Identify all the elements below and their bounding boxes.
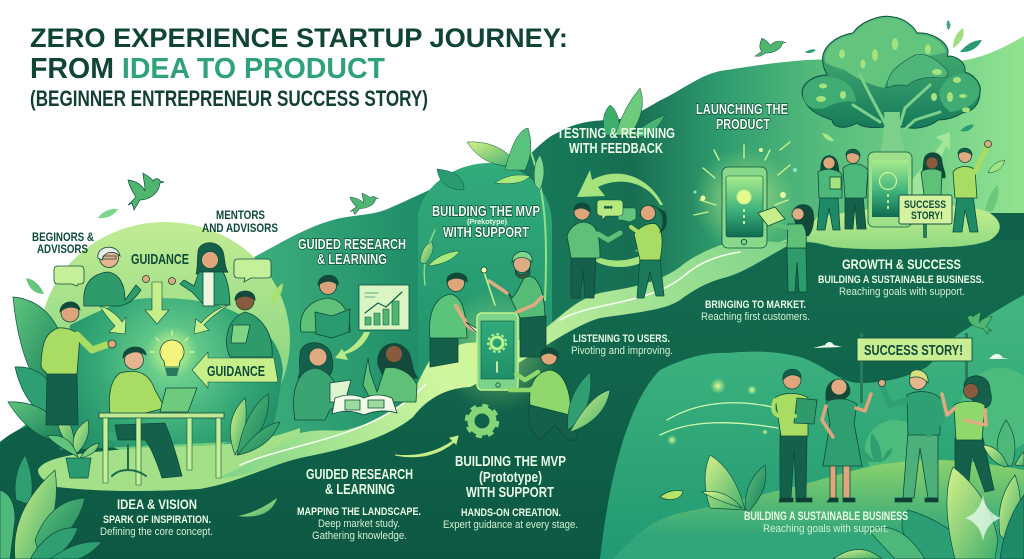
heading: testing and refining: TESTING & REFINING (557, 125, 675, 142)
heading: guided research: GUIDED RESEARCH (298, 236, 406, 253)
panel: lower left desk island (38, 428, 300, 491)
section text: idea and vision: SPARK OF INSPIRATION. (103, 514, 211, 526)
section text: bringing to market: Reaching first customers. (701, 311, 810, 323)
plant right of desk (230, 394, 280, 455)
person: man with tablet (773, 369, 817, 502)
mentor labels: GUIDANCE (131, 251, 189, 268)
plants left of idea panel (8, 297, 99, 478)
section text: listening to users: LISTENING TO USERS. (573, 333, 670, 345)
arrow: research flow (335, 332, 370, 360)
heading: testing and refining: WITH FEEDBACK (569, 140, 663, 157)
plant beside crouching helper (568, 372, 610, 432)
plants: lower right foreground (702, 420, 1024, 559)
background bushes on hill (865, 368, 1024, 480)
tree phone (868, 152, 912, 227)
person: woman delivering box (758, 205, 814, 292)
mentor labels: BEGINORS & (32, 230, 94, 244)
section text: guided research lower: MAPPING THE LANDSCAPE. (297, 506, 421, 518)
title: ZERO EXPERIENCE STARTUP JOURNEY: (30, 23, 568, 53)
mentor labels: MENTORS (216, 208, 265, 222)
mentor labels: AND ADVISORS (202, 221, 278, 235)
person: blond man waving (878, 370, 942, 502)
section text: guided research lower: Deep market study. (318, 518, 400, 530)
dark corner right of island (990, 213, 1024, 240)
person: tester man (567, 203, 620, 298)
section text: building the MVP lower: HANDS-ON CREATION. (461, 507, 561, 519)
section text: growth and success: BUILDING A SUSTAINABLE BUSINESS. (818, 274, 984, 286)
heading: launching the product: LAUNCHING THE (696, 101, 788, 118)
person: beginner advisor standing (41, 302, 116, 425)
sign: success story small: STORY! (911, 210, 943, 222)
section text: bringing to market (701, 299, 810, 323)
section text: building the MVP lower: Expert guidance at every stage. (443, 519, 578, 531)
section text: sustainable business (744, 511, 908, 535)
tree of growth (802, 16, 980, 153)
panel: building the MVP arch (418, 163, 552, 400)
section text: building the MVP lower: WITH SUPPORT (466, 484, 554, 501)
person: tester woman (631, 205, 666, 298)
panel: idea and vision circle (40, 222, 290, 458)
section text: guided research lower: GUIDED RESEARCH (306, 466, 413, 483)
person: crouching helper (510, 348, 578, 440)
person: builder left (430, 273, 484, 367)
background growth arrow (912, 132, 950, 195)
phone with gear prototype (477, 313, 518, 390)
section text: sustainable business: Reaching goals with support. (763, 523, 889, 535)
section text: listening to users: Pivoting and improving. (571, 345, 673, 357)
glow behind prototype phone (435, 288, 559, 412)
light bulb (146, 326, 198, 378)
people: launch team (817, 140, 992, 232)
launch sparks (692, 142, 797, 252)
glowing sparks on hill (660, 378, 778, 445)
leaves: top sprig above MVP (420, 88, 665, 300)
arrow: glowing progress (395, 436, 458, 457)
heading: building the MVP: BUILDING THE MVP (432, 203, 540, 220)
heading: guided research (298, 236, 406, 268)
panel: upper right island (777, 205, 1005, 249)
mentor labels: ADVISORS (37, 242, 88, 256)
person: woman in green dress (822, 379, 871, 502)
sign: success story banner: SUCCESS STORY! (864, 342, 963, 359)
section text: listening to users (571, 333, 673, 357)
section text: idea and vision (100, 496, 213, 538)
people: seated research pair (294, 343, 418, 420)
section text: bringing to market: BRINGING TO MARKET. (705, 299, 806, 311)
panel: dark lower band (0, 213, 1024, 559)
chart card (359, 285, 409, 330)
title: FROM IDEA TO PRODUCT (30, 53, 385, 85)
section text: growth and success: GROWTH & SUCCESS (842, 256, 961, 272)
speech bubbles (54, 259, 271, 286)
sign: success story banner (857, 333, 972, 403)
launch phone (722, 167, 767, 248)
sparkle star (965, 495, 1001, 541)
heading: launching the product (696, 101, 788, 133)
title: (BEGINNER ENTREPRENEUR SUCCESS STORY) (30, 86, 428, 111)
section text: growth and success: Reaching goals with support. (839, 286, 965, 298)
flowing ribbon path (217, 241, 793, 478)
person: man reading book (301, 275, 350, 338)
section text: guided research lower: & LEARNING (325, 481, 395, 498)
feedback chat bubbles: ••• (604, 203, 613, 212)
section text: building the MVP lower: (Prototype) (479, 469, 542, 486)
panel: lower right hill (600, 295, 1024, 559)
mentor labels: GUIDANCE (207, 363, 265, 380)
section text: sustainable business: BUILDING A SUSTAINABLE BUSINESS (744, 511, 908, 523)
section text: growth and success (818, 256, 984, 298)
sign: success story small: SUCCESS (904, 199, 946, 211)
section text: building the MVP lower: BUILDING THE MVP (455, 453, 566, 470)
heading: testing and refining (557, 125, 675, 157)
heading: building the MVP: (Prekotype) (467, 219, 507, 226)
person: woman with raised arm (942, 376, 994, 492)
heading: building the MVP: WITH SUPPORT (443, 224, 529, 241)
section text: guided research lower (297, 466, 421, 542)
arrows: guidance flow to idea (100, 282, 278, 388)
heading: building the MVP (432, 203, 540, 241)
sign: success story small (899, 195, 952, 238)
icon: gear (466, 406, 498, 436)
heading: launching the product: PRODUCT (716, 116, 770, 133)
title (30, 23, 568, 111)
arrows: feedback loop (577, 170, 663, 267)
person: bearded mentor (481, 252, 546, 357)
panel: front hill (613, 460, 1024, 559)
person: founder at desk with laptop (99, 347, 224, 485)
person: older mentor (84, 247, 150, 306)
mentor labels (32, 208, 278, 380)
person: woman mentor (168, 243, 230, 306)
small hill plant (862, 433, 892, 462)
plants: lower left foreground (0, 455, 102, 559)
section text: idea and vision: IDEA & VISION (117, 496, 197, 512)
section text: building the MVP lower (443, 453, 578, 531)
person: advisor with tablet (226, 291, 272, 357)
birds (128, 38, 992, 500)
feedback chat bubbles (597, 200, 636, 222)
section text: guided research lower: Gathering knowledge. (312, 530, 407, 542)
heading: guided research: & LEARNING (317, 251, 387, 268)
section text: idea and vision: Defining the core concept. (100, 526, 213, 538)
